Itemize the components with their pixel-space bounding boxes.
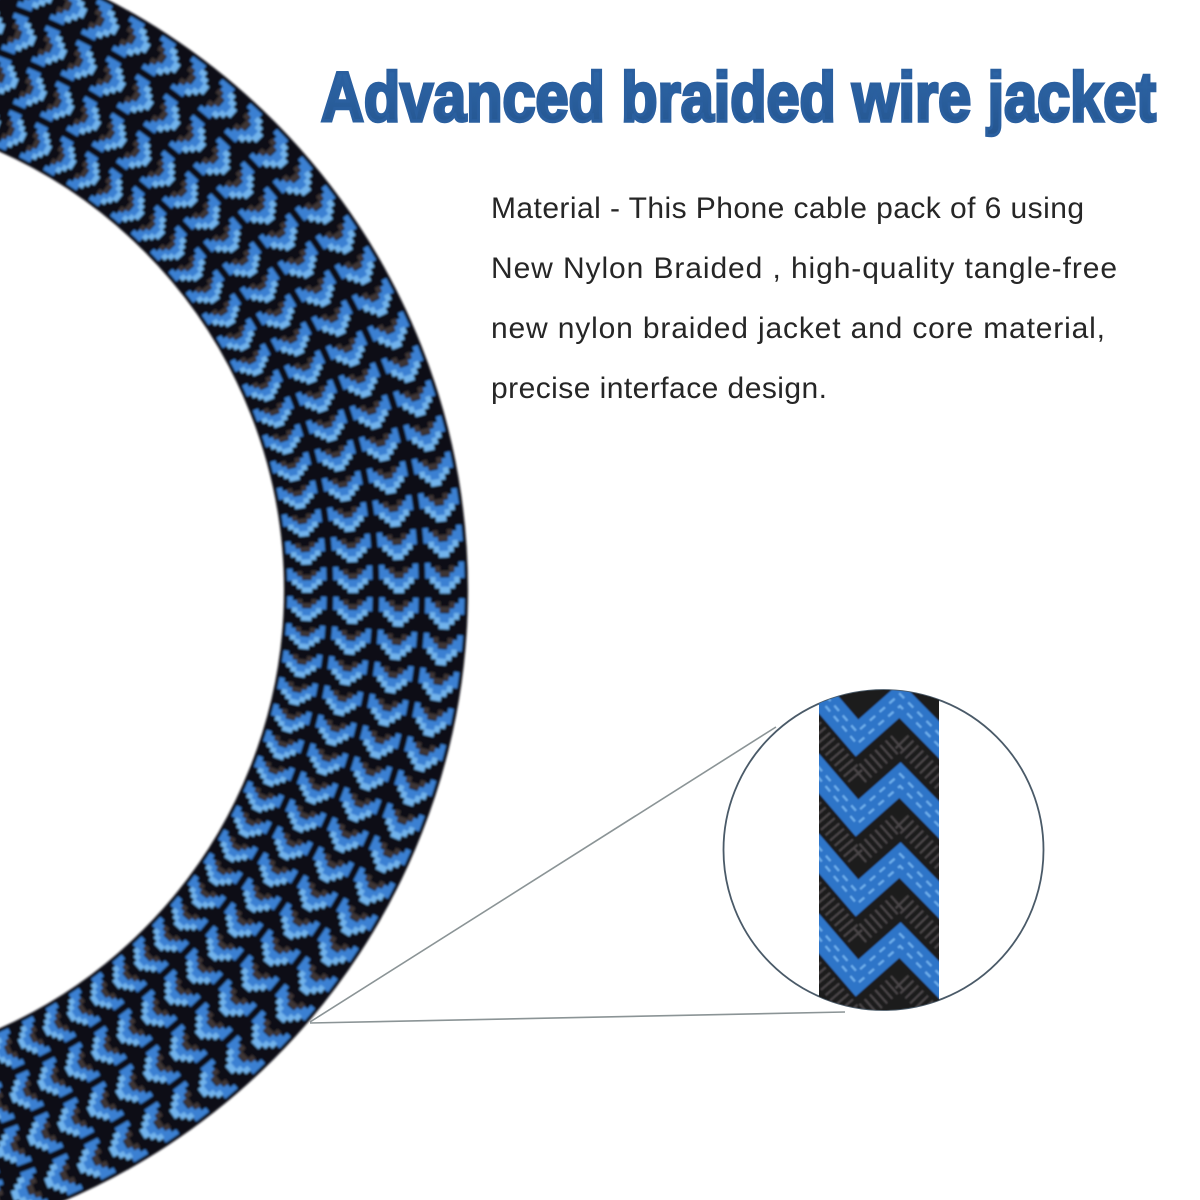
description text block	[491, 192, 1117, 405]
blue thread highlights	[819, 692, 939, 988]
description text block: Material - This Phone cable pack of 6 using	[491, 192, 1084, 225]
description text block: New Nylon Braided , high-quality tangle-free	[491, 252, 1117, 285]
magnifier circle outline	[724, 690, 1044, 1010]
magnified cable strip	[819, 690, 939, 1010]
cable strand 1	[0, 70, 324, 1110]
callout leader lines	[310, 727, 845, 1023]
grey thread bands	[819, 721, 939, 1010]
cable strand 3	[0, 0, 416, 1200]
blue thread bands	[819, 690, 939, 1000]
cable strand 2	[0, 24, 370, 1156]
magnified braid callout	[724, 670, 1044, 1030]
description text block: new nylon braided jacket and core material,	[491, 312, 1105, 345]
description text block: precise interface design.	[491, 372, 827, 405]
cable strand 4	[0, 0, 462, 1200]
cable dark base	[0, 18, 376, 1162]
braided cable coil	[0, 0, 462, 1200]
